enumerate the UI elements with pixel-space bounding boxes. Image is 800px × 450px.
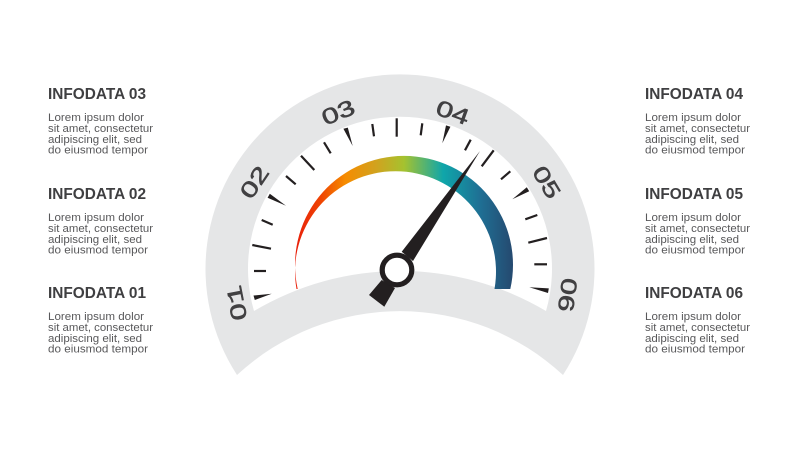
scale label 01: 01 [221,283,254,323]
text block: INFODATA 06: do eiusmod tempor [645,344,745,356]
text block: INFODATA 01: INFODATA 01 [48,285,146,302]
text block: INFODATA 03: Lorem ipsum dolor [48,112,144,124]
scale label 03: 03 [318,95,359,130]
text block: INFODATA 04 [645,86,750,156]
text block: INFODATA 05: adipiscing elit, sed [645,234,739,246]
text block: INFODATA 03: adipiscing elit, sed [48,134,142,146]
gauge outer grey band [206,74,595,375]
text block: INFODATA 06: INFODATA 06 [645,285,743,302]
text block: INFODATA 05 [645,186,750,256]
text block: INFODATA 06: adipiscing elit, sed [645,333,739,345]
text block: INFODATA 04: INFODATA 04 [645,86,743,103]
text block: INFODATA 02: sit amet, consectetur [48,223,153,235]
text block: INFODATA 02 [48,186,153,256]
text block: INFODATA 05: INFODATA 05 [645,186,743,203]
text block: INFODATA 03 [48,86,153,156]
text block: INFODATA 04: do eiusmod tempor [645,144,745,156]
tick marks [252,118,549,300]
scale label 04: 04 [433,95,473,130]
text block: INFODATA 02: do eiusmod tempor [48,244,148,256]
scale label 05: 05 [527,161,566,203]
text block: INFODATA 01: sit amet, consectetur [48,322,153,334]
text block: INFODATA 02: adipiscing elit, sed [48,234,142,246]
text block: INFODATA 02: INFODATA 02 [48,186,146,203]
scale label 06: 06 [553,276,582,313]
text block: INFODATA 01: Lorem ipsum dolor [48,311,144,323]
text block: INFODATA 05: sit amet, consectetur [645,223,750,235]
text block: INFODATA 06 [645,285,750,356]
text block: INFODATA 05: Lorem ipsum dolor [645,212,741,224]
text block: INFODATA 01: do eiusmod tempor [48,344,148,356]
text block: INFODATA 04: Lorem ipsum dolor [645,112,741,124]
text block: INFODATA 02: Lorem ipsum dolor [48,212,144,224]
text block: INFODATA 01 [48,285,153,356]
text block: INFODATA 05: do eiusmod tempor [645,244,745,256]
text block: INFODATA 03: sit amet, consectetur [48,123,153,135]
gauge white dial face [248,117,552,311]
text block: INFODATA 03: INFODATA 03 [48,86,146,103]
gradient progress arc [295,156,513,289]
text block: INFODATA 06: sit amet, consectetur [645,322,750,334]
text block: INFODATA 04: adipiscing elit, sed [645,134,739,146]
text block: INFODATA 03: do eiusmod tempor [48,144,148,156]
text block: INFODATA 04: sit amet, consectetur [645,123,750,135]
gauge needle [369,151,480,307]
scale label 02: 02 [235,161,274,203]
text block: INFODATA 01: adipiscing elit, sed [48,333,142,345]
text block: INFODATA 06: Lorem ipsum dolor [645,311,741,323]
